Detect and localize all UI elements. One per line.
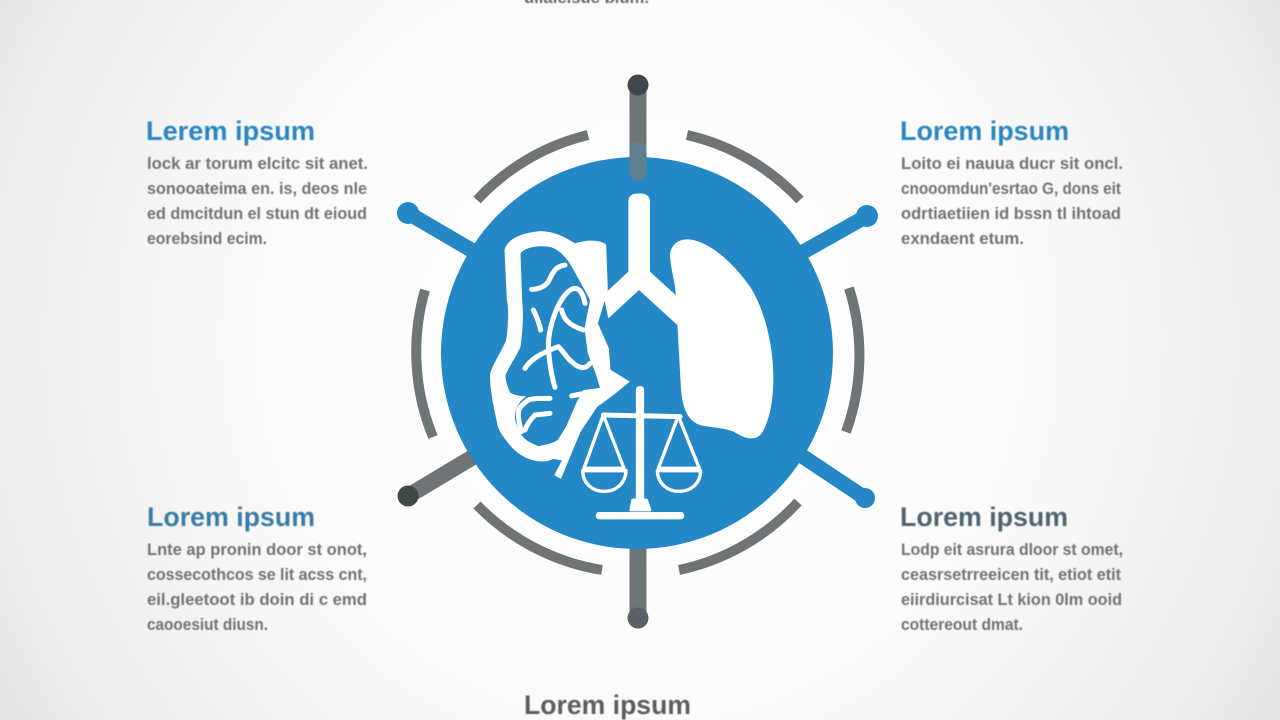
body copy: Loito ei nauua ducr sit oncl.	[901, 154, 1123, 173]
body copy: sonooateima en. is, deos nle	[147, 179, 367, 198]
icon: brain outline	[491, 232, 629, 478]
body copy: exndaent etum.	[901, 229, 1024, 248]
body copy: eiirdiurcisat Lt kion 0lm ooid	[901, 590, 1122, 609]
spoke: lower left	[398, 454, 478, 506]
body copy: caooesiut diusn.	[147, 615, 268, 634]
blue disc	[441, 157, 833, 549]
body copy: eil.gleetoot ib doin di c emd	[147, 590, 367, 609]
text block: lower left	[147, 502, 367, 634]
outer ring segments	[416, 135, 859, 570]
text block: lower right	[900, 502, 1123, 634]
body copy: cossecothcos se lit acss cnt,	[147, 565, 367, 584]
text block: upper left	[146, 116, 368, 248]
body copy: cottereout dmat.	[901, 615, 1023, 634]
icon: brain folds	[518, 265, 590, 432]
top spoke overlap on disc	[630, 150, 646, 172]
heading: Lorem ipsum	[900, 502, 1068, 532]
spoke: upper left	[397, 202, 478, 254]
spoke: top	[628, 74, 648, 170]
body copy: cnooomdun'esrtao G, dons eit	[901, 179, 1121, 198]
diagram: central hub	[397, 74, 878, 628]
body copy: Lnte ap pronin door st onot,	[147, 540, 367, 559]
body copy: odrtiaetiien id bssn tl ihtoad	[901, 204, 1121, 223]
spoke: upper right	[796, 205, 878, 256]
heading: Lorem ipsum	[900, 116, 1069, 146]
body copy: ed dmcitdun el stun dt eioud	[147, 204, 367, 223]
text block: upper right	[900, 116, 1123, 248]
bottom heading: Lorem ipsum	[524, 690, 691, 720]
icon group: lungs, brain and scales	[491, 193, 773, 516]
body copy: eorebsind ecim.	[147, 229, 267, 248]
heading: Lerem ipsum	[146, 116, 315, 146]
body copy: ceasrsetrreeicen tit, etiot etit	[901, 565, 1121, 584]
body copy: lock ar torum elcitc sit anet.	[147, 154, 368, 173]
icon: right lung	[670, 239, 773, 438]
spoke: lower right	[796, 452, 875, 508]
icon: scales of justice	[583, 390, 701, 516]
heading: Lorem ipsum	[147, 502, 315, 532]
spoke: bottom	[628, 540, 648, 628]
body copy: Lodp eit asrura dloor st omet,	[901, 540, 1123, 559]
icon: trachea and bronchi	[603, 193, 677, 325]
